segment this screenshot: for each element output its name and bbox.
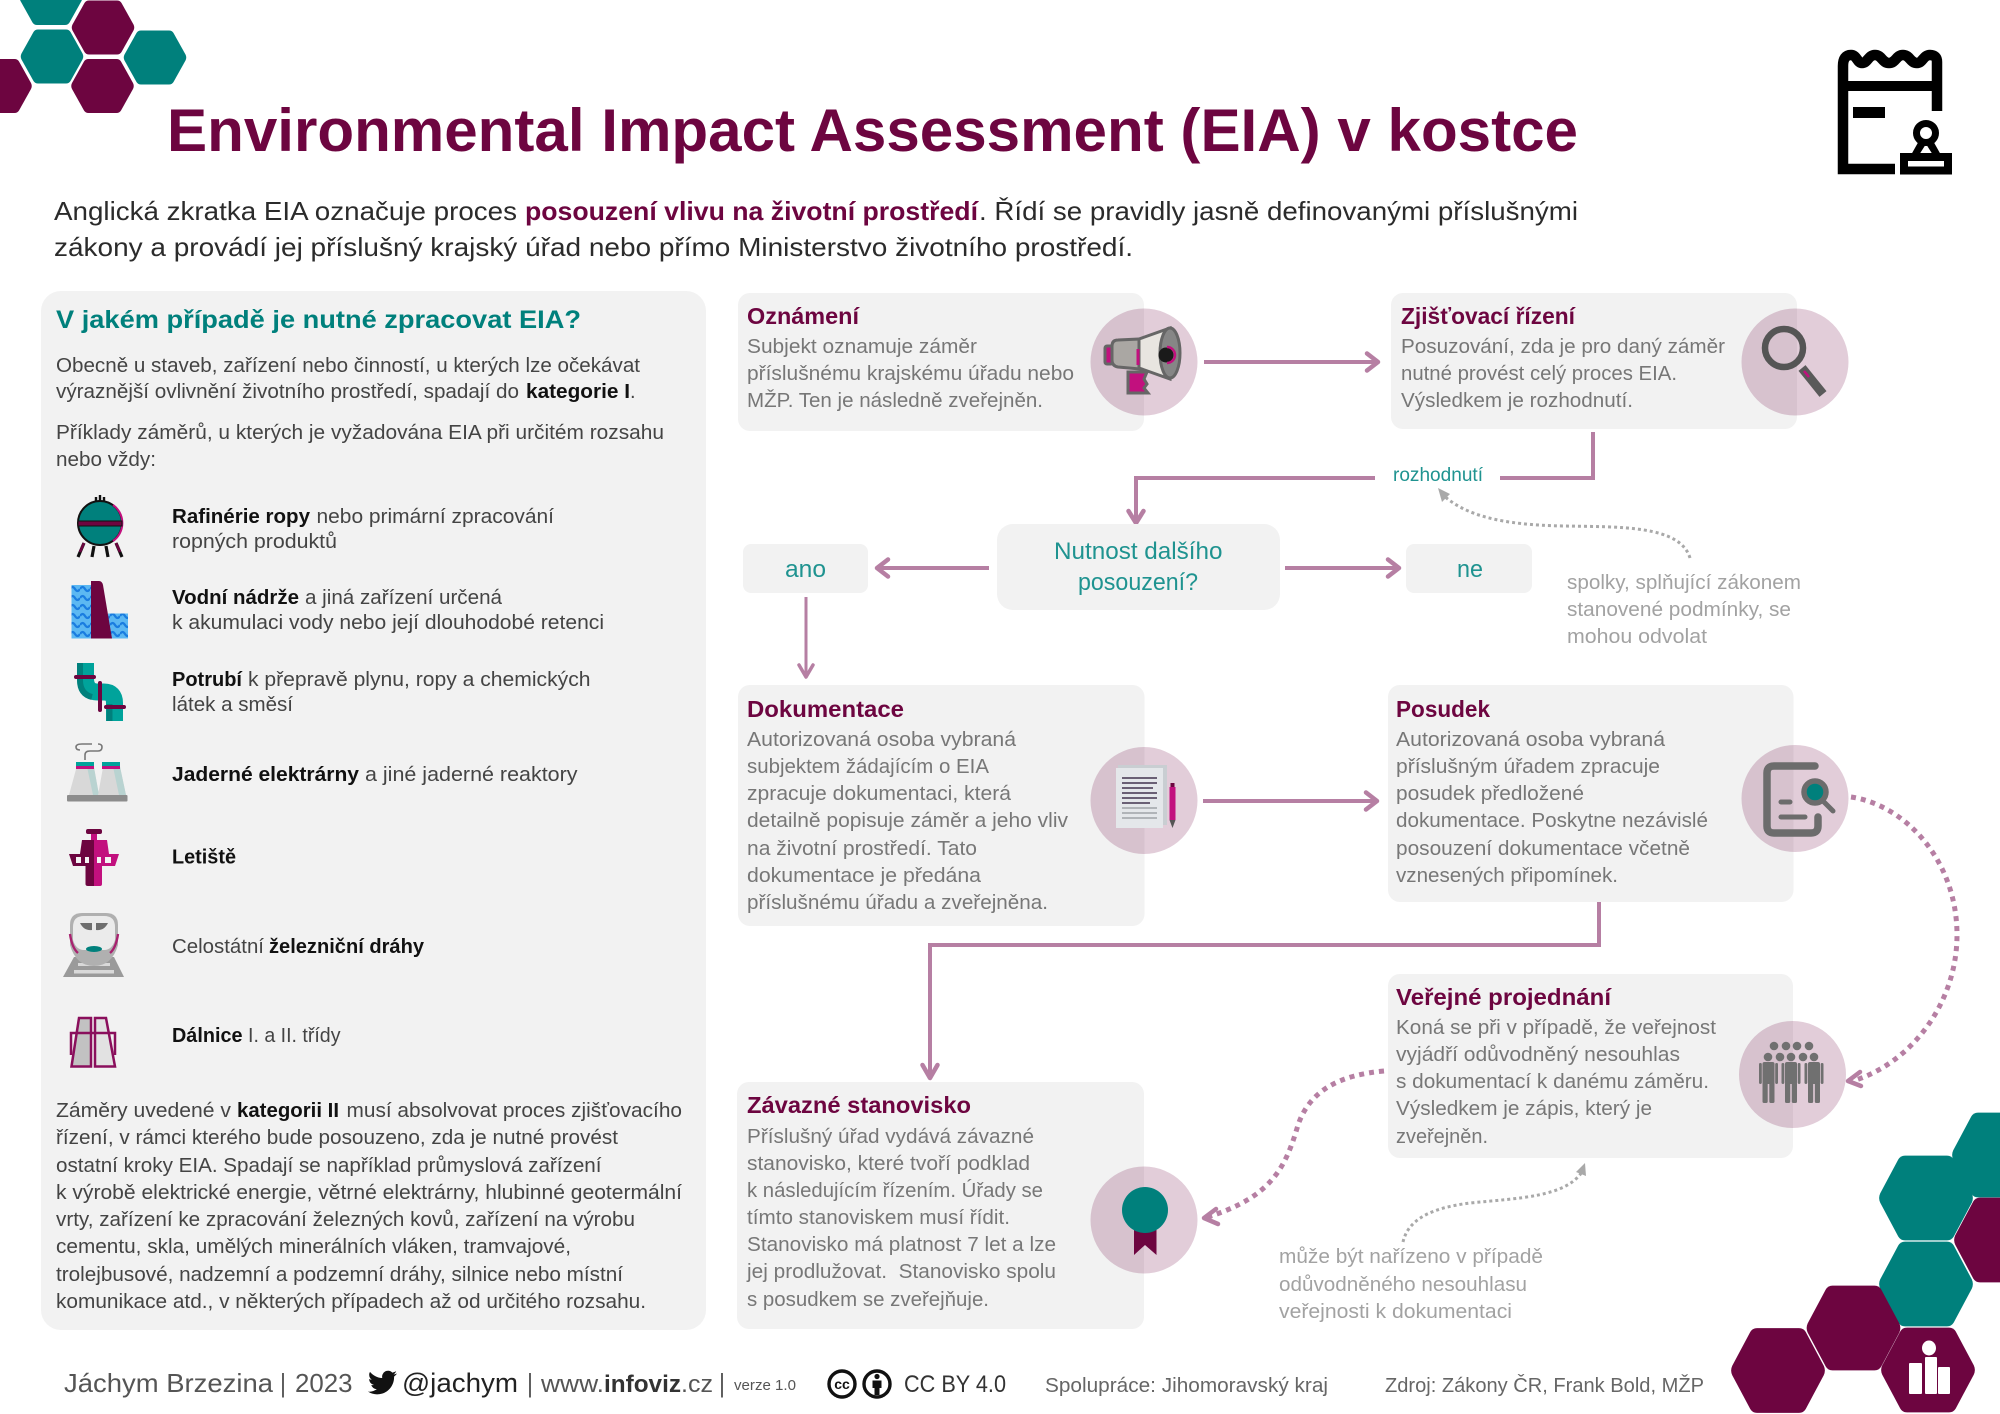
step text: Posuzování, zda je pro daný záměr — [1401, 336, 1725, 358]
decorative hexagons bottom right — [1731, 1113, 2000, 1413]
list item: highways — [172, 1025, 340, 1047]
step heading: Zjišťovací řízení — [1401, 303, 1577, 329]
note: public hearing — [1279, 1246, 1543, 1323]
step text: vyjádří odůvodněný nesouhlas — [1396, 1044, 1680, 1066]
step text: Výsledkem je zápis, který je — [1396, 1098, 1652, 1120]
dotted arrow: Veřejné projednání to Závazné stanovisko — [1204, 1071, 1384, 1224]
step text: příslušným úřadem zpracuje — [1396, 756, 1660, 778]
icon: group of people — [1759, 1042, 1824, 1103]
arrow: decision to ano — [877, 560, 989, 576]
footer: social and website: infoviz — [604, 1371, 681, 1398]
intro paragraph: Příklady záměrů, u kterých je vyžadována EIA při určitém rozsahu — [56, 422, 664, 444]
icon: medal — [1122, 1187, 1168, 1255]
step text — [1401, 336, 1725, 412]
footer: social and website: @jachym — [402, 1368, 518, 1398]
list item: railways — [172, 936, 425, 958]
list item: dam — [172, 587, 604, 634]
list item: refinery: Rafinérie ropy — [172, 506, 311, 528]
step text: detailně popisuje záměr a jeho vliv — [747, 810, 1068, 832]
footer: social and website: www. — [540, 1371, 604, 1398]
category II paragraph — [56, 1100, 682, 1313]
category II paragraph: komunikace atd., v některých případech až od určitého rozsahu. — [56, 1291, 646, 1313]
category II paragraph: cementu, skla, umělých minerálních vláken, tramvajové, — [56, 1236, 571, 1258]
icon: twitter bird — [368, 1371, 397, 1394]
arrow: appeal note to decision — [1438, 488, 1690, 558]
intro text: . Řídí se pravidly jasně definovanými příslušnými — [979, 196, 1578, 226]
category II paragraph: řízení, v rámci kterého bude posouzeno, zda je nutné provést — [56, 1127, 618, 1149]
step text: MŽP. Ten je následně zveřejněn. — [747, 389, 1043, 412]
step text — [747, 729, 1068, 914]
list item: railways: Celostátní — [172, 936, 264, 958]
step text: zpracuje dokumentaci, která — [747, 783, 1012, 805]
footer: social and website: .cz — [681, 1371, 713, 1398]
panel heading: V jakém případě je nutné zpracovat EIA? — [56, 306, 581, 334]
intro text: zákony a provádí jej příslušný krajský úřad nebo přímo Ministerstvo životního prostředí. — [54, 232, 1133, 262]
footer: author — [64, 1368, 352, 1398]
arrow: Posudek to Závazné stanovisko — [922, 902, 1599, 1078]
intro paragraph: výraznější ovlivnění životního prostředí, spadají do — [56, 381, 519, 403]
answer: ano — [743, 544, 868, 593]
icon: megaphone — [1105, 328, 1180, 393]
step text: nutné provést celý proces EIA. — [1401, 363, 1677, 385]
dotted arrow: Posudek to Veřejné projednání — [1848, 797, 1957, 1086]
step text: jej prodlužovat. Stanovisko spolu — [746, 1261, 1056, 1283]
list item: dam: a jiná zařízení určená — [305, 587, 503, 609]
icon: creative commons — [829, 1371, 890, 1397]
step text: Autorizovaná osoba vybraná — [1396, 729, 1666, 751]
step text: tímto stanoviskem musí řídit. — [747, 1207, 1010, 1229]
list item: pipeline: k přepravě plynu, ropy a chemických — [248, 669, 590, 691]
step text: posouzení dokumentace včetně — [1396, 838, 1690, 860]
icon: airport control tower — [69, 829, 119, 886]
footer: social and website: | — [527, 1368, 533, 1398]
arrow: Oznámení to Zjišťovací řízení — [1204, 354, 1378, 370]
answer: ne: ne — [1457, 556, 1483, 583]
step text: příslušnému krajskému úřadu nebo — [747, 363, 1074, 385]
note: public hearing: odůvodněného nesouhlasu — [1279, 1274, 1527, 1296]
step text: Koná se při v případě, že veřejnost — [1396, 1017, 1716, 1039]
step: Zjišťovací řízení — [1391, 293, 1848, 429]
decision box: posouzení? — [1078, 569, 1198, 596]
footer: social and website: verze 1.0 — [734, 1377, 796, 1394]
step text: Stanovisko má platnost 7 let a lze — [747, 1234, 1056, 1256]
intro text — [54, 196, 1578, 262]
intro paragraph: nebo vždy: — [56, 449, 156, 471]
title: Environmental Impact Assessment (EIA) v kostce — [167, 97, 1578, 164]
answer: ano: ano — [785, 556, 826, 583]
note: public hearing: může být nařízeno v případě — [1279, 1246, 1543, 1268]
intro paragraph — [56, 355, 664, 471]
step text: dokumentace je předána — [747, 865, 982, 887]
icon: dam — [72, 581, 128, 638]
list item: railways: železniční dráhy — [269, 936, 425, 958]
footer: social and website: | — [719, 1368, 725, 1398]
step text: stanovisko, které tvoří podklad — [747, 1153, 1030, 1175]
step text: k následujícím řízením. Úřady se — [747, 1179, 1043, 1202]
list item: dam: Vodní nádrže — [172, 587, 299, 609]
decision box — [997, 524, 1280, 610]
category II paragraph: Záměry uvedené v — [56, 1100, 231, 1122]
decision box: Nutnost dalšího — [1054, 538, 1222, 565]
intro text: Anglická zkratka EIA označuje proces — [54, 196, 517, 226]
step text — [747, 336, 1074, 412]
panel: when EIA is required — [41, 291, 706, 1330]
step text: s posudkem se zveřejňuje. — [747, 1289, 989, 1311]
icon: magnifier — [1765, 329, 1823, 394]
list item: nuclear plants: Jaderné elektrárny — [172, 764, 360, 786]
step heading: Veřejné projednání — [1396, 984, 1613, 1010]
footer: social and website — [402, 1368, 796, 1398]
icon: refinery — [78, 495, 122, 557]
note: appeal: mohou odvolat — [1567, 626, 1707, 648]
footer: author: | — [280, 1368, 286, 1398]
footer: author: Jáchym Brzezina — [64, 1368, 274, 1398]
category II paragraph: musí absolvovat proces zjišťovacího — [346, 1100, 682, 1122]
icon: highway — [71, 1018, 115, 1066]
note: public hearing: veřejnosti k dokumentaci — [1279, 1301, 1512, 1323]
note: appeal: spolky, splňující zákonem — [1567, 572, 1801, 594]
label: rozhodnutí: rozhodnutí — [1393, 465, 1484, 486]
step heading: Dokumentace — [747, 696, 904, 722]
list item: pipeline — [172, 669, 590, 716]
step: Veřejné projednání — [1388, 974, 1846, 1158]
step: Posudek — [1388, 685, 1848, 902]
list item: highways: I. a II. třídy — [248, 1025, 340, 1047]
footer: author: 2023 — [295, 1368, 352, 1398]
list item: refinery: nebo primární zpracování — [316, 506, 554, 528]
arrow: decision to ne — [1285, 560, 1399, 576]
category II paragraph: trolejbusové, nadzemní a podzemní dráhy, silnice nebo místní — [56, 1264, 623, 1286]
answer: ne — [1406, 544, 1532, 593]
note: appeal: stanovené podmínky, se — [1567, 599, 1791, 621]
category II paragraph: kategorii II — [237, 1100, 339, 1122]
step text: Autorizovaná osoba vybraná — [747, 729, 1017, 751]
step text — [1396, 1017, 1716, 1148]
category II paragraph: k výrobě elektrické energie, větrné elektrárny, hlubinné geotermální — [56, 1182, 682, 1204]
icon: document and pen — [1116, 765, 1176, 828]
list item: nuclear plants: a jiné jaderné reaktory — [365, 764, 578, 786]
step text — [1396, 729, 1708, 887]
icon: infoviz logo person and bars — [1909, 1340, 1950, 1394]
step text: Výsledkem je rozhodnutí. — [1401, 390, 1633, 412]
category II paragraph: vrty, zařízení ke zpracování železných kovů, zařízení na výrobu — [56, 1209, 635, 1231]
intro paragraph: Obecně u staveb, zařízení nebo činností, u kterých lze očekávat — [56, 355, 640, 377]
step text: Příslušný úřad vydává závazné — [747, 1126, 1034, 1148]
list item: highways: Dálnice — [172, 1025, 242, 1047]
list item: refinery: ropných produktů — [172, 531, 337, 553]
icon: document review — [1767, 766, 1833, 833]
icon: train on rails — [63, 913, 124, 977]
step text: dokumentace. Poskytne nezávislé — [1396, 810, 1708, 832]
list item: airport: Letiště — [172, 846, 236, 868]
step: Oznámení — [738, 293, 1198, 431]
arrow: Dokumentace to Posudek — [1203, 792, 1377, 810]
step text: Subjekt oznamuje záměr — [747, 336, 977, 358]
step text: příslušnému úřadu a zveřejněna. — [747, 892, 1048, 914]
footer: source: Zdroj: Zákony ČR, Frank Bold, MŽP — [1385, 1374, 1704, 1397]
list item: pipeline: Potrubí — [172, 669, 243, 691]
step heading: Posudek — [1396, 696, 1490, 722]
icon: document with stamp — [1843, 55, 1948, 170]
intro paragraph: . — [630, 381, 636, 403]
list item: refinery — [172, 506, 554, 553]
icon: creative commons: cc — [834, 1376, 850, 1392]
step text: s dokumentací k danému záměru. — [1396, 1071, 1709, 1093]
step heading: Oznámení — [747, 303, 861, 329]
footer: cooperation: Spolupráce: Jihomoravský kraj — [1045, 1375, 1328, 1397]
step: Dokumentace — [738, 685, 1198, 926]
list item: pipeline: látek a směsí — [172, 694, 293, 716]
icon: pipeline — [76, 663, 124, 721]
icon: nuclear power plant — [67, 744, 128, 802]
note: appeal — [1567, 572, 1801, 648]
category II paragraph: ostatní kroky EIA. Spadají se například průmyslová zařízení — [56, 1155, 602, 1177]
step text: vznesených připomínek. — [1396, 865, 1618, 887]
arrow: ano to Dokumentace — [799, 597, 813, 677]
intro paragraph: kategorie I — [526, 381, 630, 403]
intro text: posouzení vlivu na životní prostředí — [525, 196, 979, 226]
step text — [746, 1126, 1056, 1311]
list item: nuclear plants — [172, 764, 578, 786]
decorative hexagons top left — [0, 0, 186, 113]
arrow: public hearing note to hearing box — [1403, 1163, 1586, 1242]
step text: na životní prostředí. Tato — [747, 838, 977, 860]
step heading: Závazné stanovisko — [747, 1092, 971, 1118]
list item: dam: k akumulaci vody nebo její dlouhodobé retenci — [172, 612, 604, 634]
step text: zveřejněn. — [1396, 1126, 1488, 1148]
step text: posudek předložené — [1396, 783, 1584, 805]
step text: subjektem žádajícím o EIA — [747, 756, 990, 778]
step: Závazné stanovisko — [737, 1082, 1198, 1329]
arrow: decision connector — [1128, 432, 1593, 523]
footer: licence: CC BY 4.0 — [904, 1371, 1006, 1398]
